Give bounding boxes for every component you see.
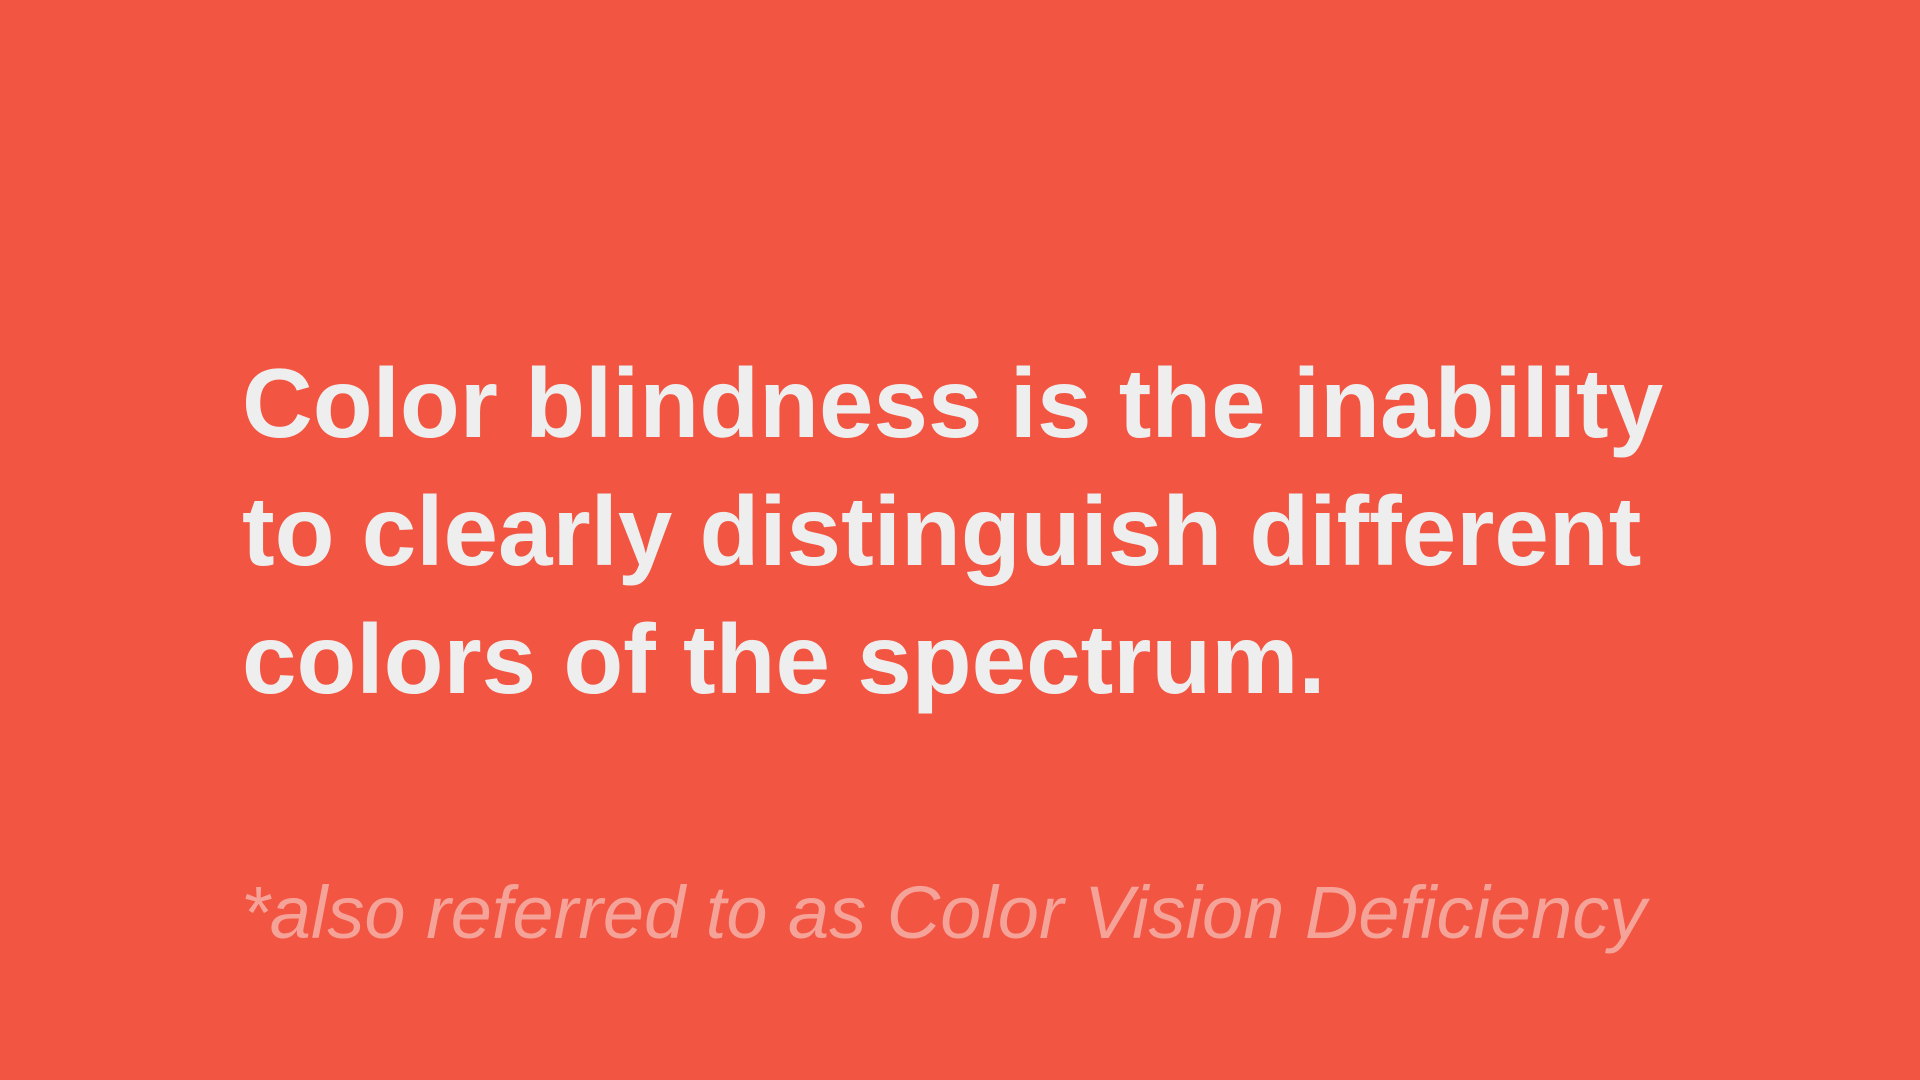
- main statement text: colors of the spectrum.: [242, 604, 1326, 714]
- footnote: *also referred to as Color Vision Deficiency: [241, 871, 1646, 954]
- main statement text: Color blindness is the inability: [242, 348, 1663, 458]
- main statement text: [242, 348, 1663, 714]
- main statement text: to clearly distinguish different: [242, 476, 1641, 586]
